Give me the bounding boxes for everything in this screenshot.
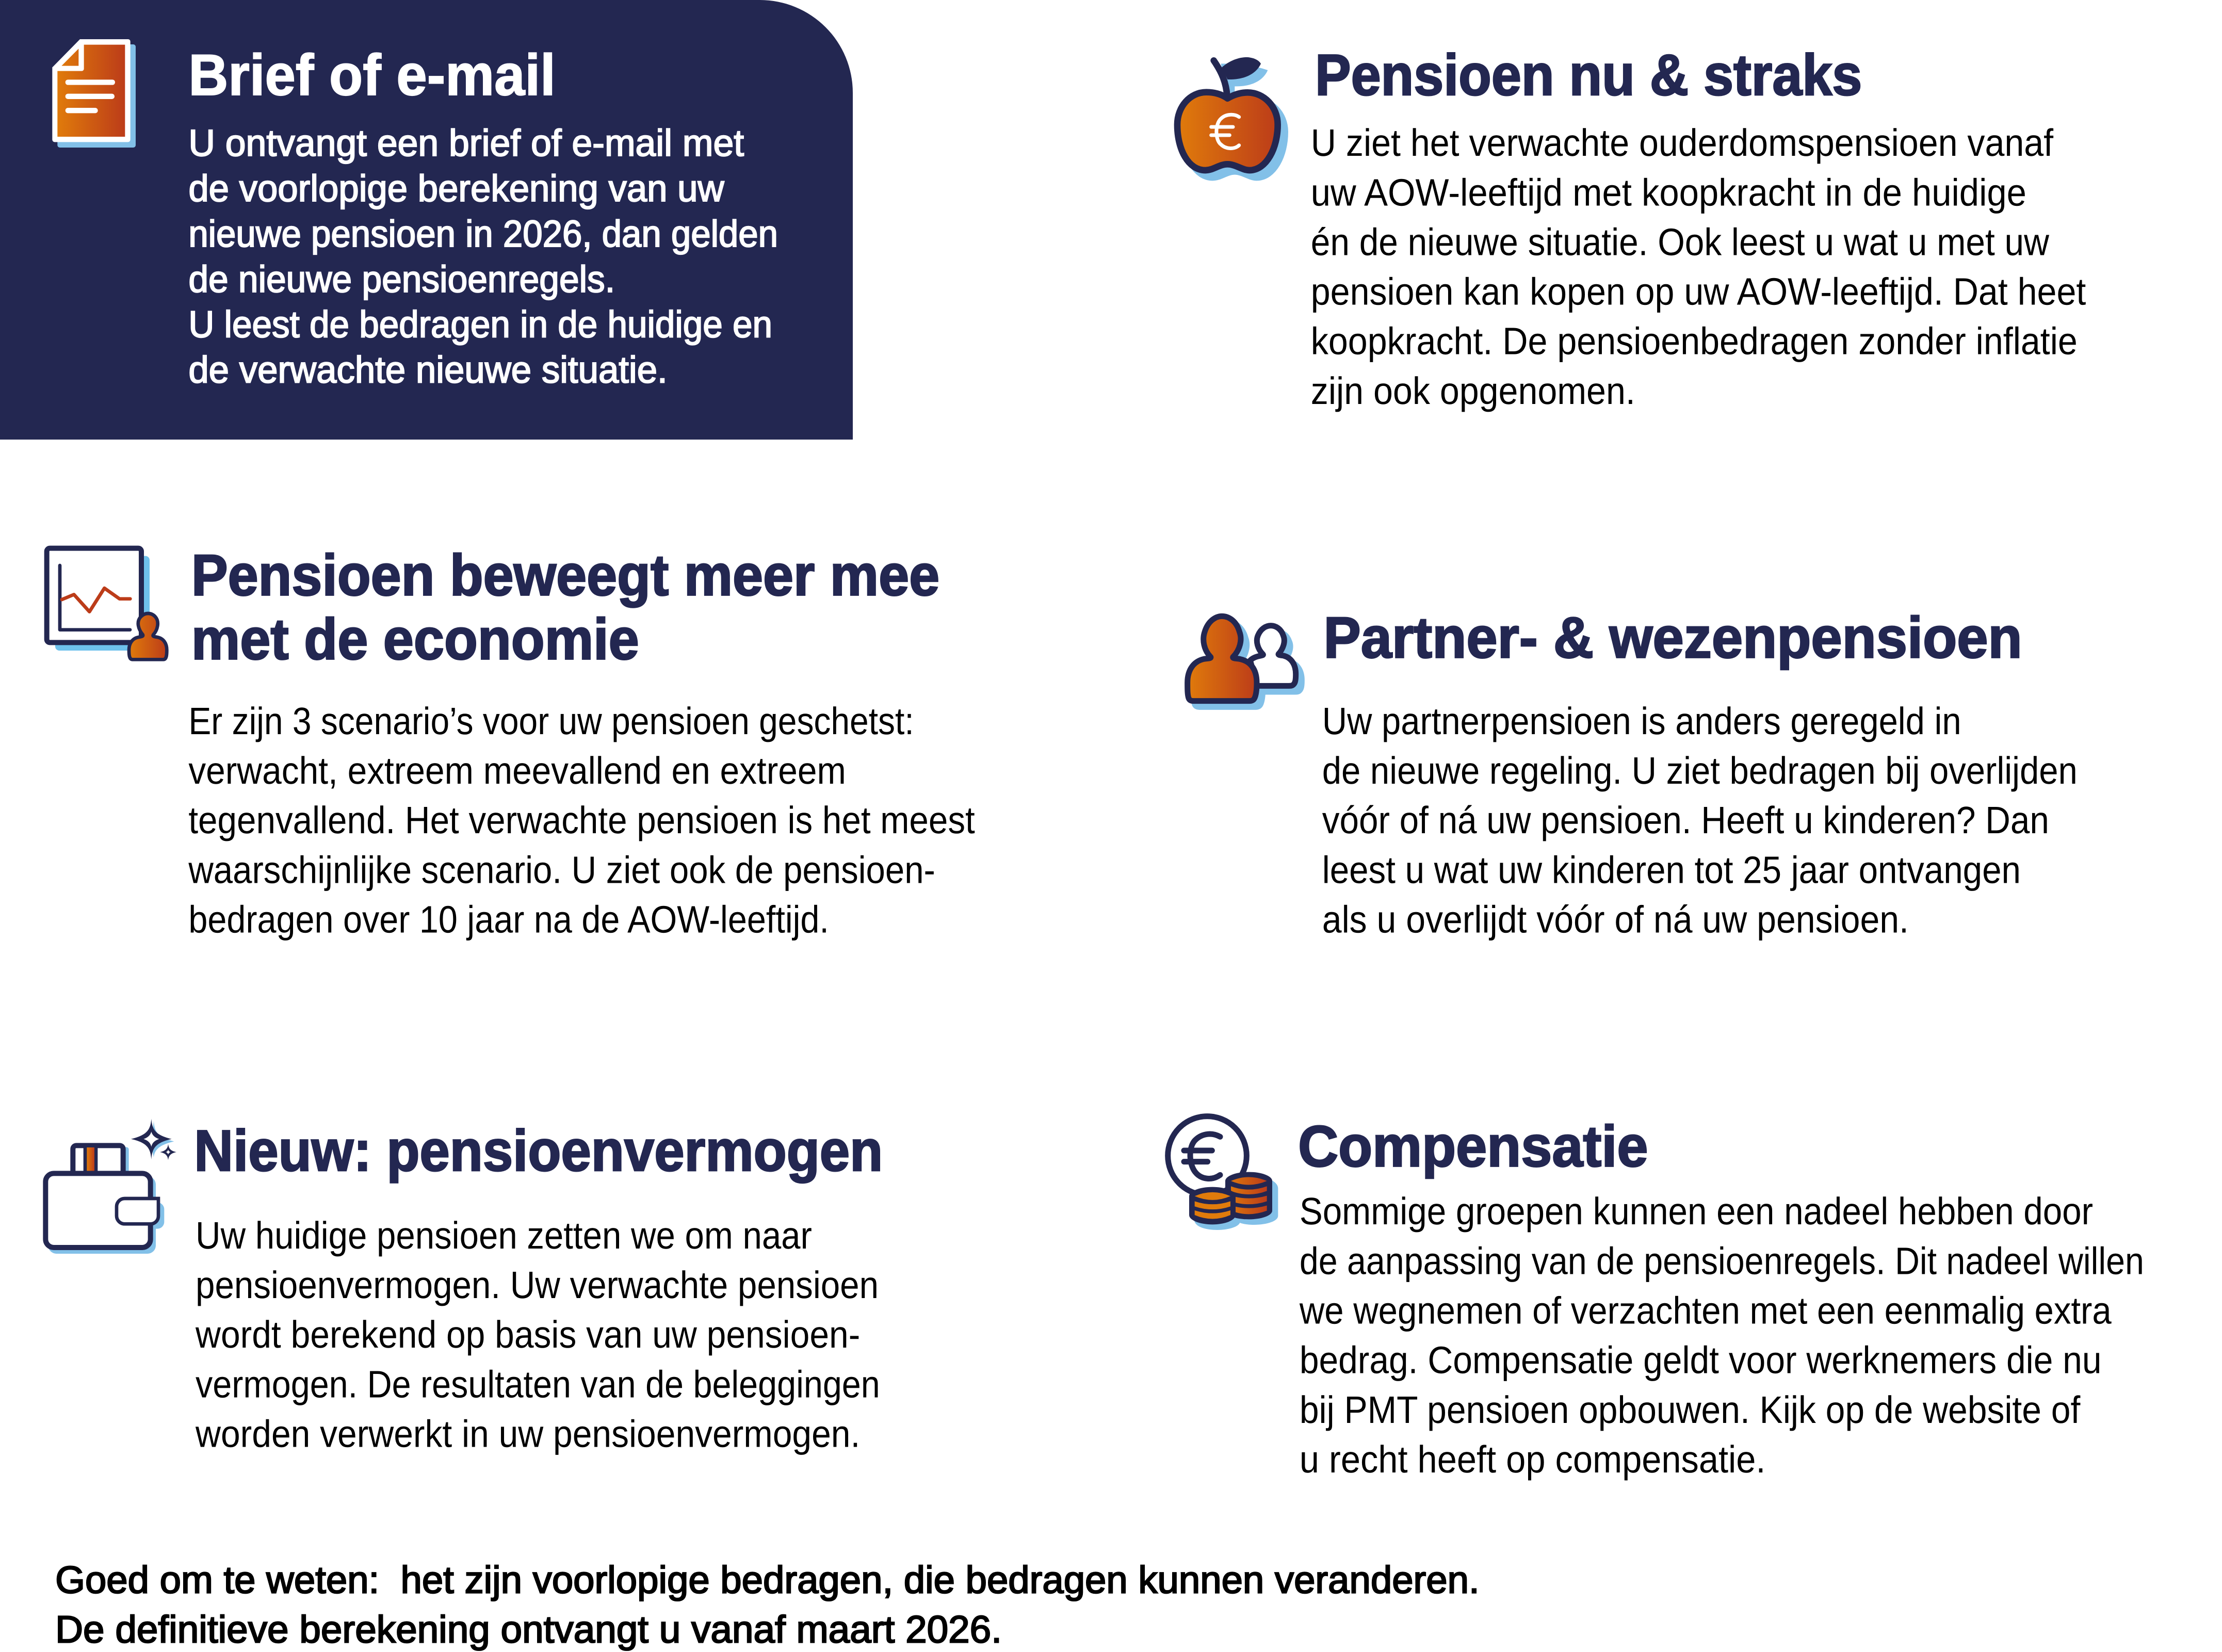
text block: pensioen nu body: zijn ook opgenomen. (1311, 370, 1635, 412)
section: Nieuw: pensioenvermogen (45, 1118, 883, 1455)
text block: pensioenvermogen body: worden verwerkt in uw pensioenvermogen. (194, 1413, 860, 1455)
text block: brief body (188, 122, 778, 391)
heading: Pensioen beweegt meer mee met de economie: met de economie (191, 607, 639, 672)
footer note (55, 1559, 1480, 1651)
text block: pensioen nu body (1311, 122, 2087, 412)
text block: pensioenvermogen body: wordt berekend op basis van uw pensioen- (194, 1314, 860, 1356)
footer note: Goed om te weten: het zijn voorlopige bedragen, die bedragen kunnen veranderen. (55, 1559, 1480, 1601)
text block: partner body: vóór of ná uw pensioen. Heeft u kinderen? Dan (1322, 799, 2049, 842)
text block: pensioen nu body: pensioen kan kopen op uw AOW-leeftijd. Dat heet (1311, 271, 2087, 313)
text block: compensatie body: we wegnemen of verzachten met een eenmalig extra (1298, 1290, 2113, 1332)
text block: partner body: de nieuwe regeling. U ziet bedragen bij overlijden (1322, 750, 2078, 792)
text block: compensatie body: Sommige groepen kunnen een nadeel hebben door (1300, 1190, 2093, 1233)
heading: Compensatie: Compensatie (1298, 1114, 1648, 1179)
text block: partner body: als u overlijdt vóór of ná uw pensioen. (1322, 898, 1909, 941)
heading: Nieuw: pensioenvermogen: Nieuw: pensioenvermogen (194, 1118, 883, 1184)
text block: partner body: leest u wat uw kinderen tot 25 jaar ontvangen (1322, 849, 2021, 892)
text block: partner body (1322, 700, 2078, 941)
heading: Pensioen beweegt meer mee met de economie (191, 543, 939, 672)
icon: two persons (1188, 616, 1302, 707)
icon: chart with person (47, 548, 167, 659)
heading: Pensioen beweegt meer mee met de economie: Pensioen beweegt meer mee (191, 543, 939, 608)
text block: pensioenvermogen body: Uw huidige pensioen zetten we om naar (196, 1214, 812, 1257)
text block: economie body: waarschijnlijke scenario. U ziet ook de pensioen- (187, 849, 935, 892)
footer note: De definitieve berekening ontvangt u vanaf maart 2026. (55, 1609, 1002, 1651)
section: Compensatie (1168, 1114, 2144, 1481)
text block: pensioenvermogen body: vermogen. De resultaten van de beleggingen (196, 1363, 880, 1406)
text block: economie body: verwacht, extreem meevallend en extreem (188, 750, 846, 792)
text block: compensatie body: u recht heeft op compensatie. (1300, 1438, 1766, 1481)
text block: pensioenvermogen body (194, 1214, 880, 1455)
icon: euro coin and stacks (1168, 1116, 1278, 1230)
text block: brief body: U ontvangt een brief of e-mail met (188, 122, 745, 165)
text block: pensioen nu body: én de nieuwe situatie. Ook leest u wat u met uw (1311, 221, 2050, 264)
icon: wallet with sparkles (45, 1119, 176, 1254)
icon: apple with euro (1177, 57, 1285, 177)
text block: partner body: Uw partnerpensioen is anders geregeld in (1322, 700, 1961, 742)
text block: economie body (187, 700, 976, 941)
text block: brief body: de verwachte nieuwe situatie. (188, 349, 668, 391)
section: Pensioen nu & straks (1177, 42, 2087, 412)
text block: compensatie body (1298, 1190, 2144, 1481)
panel background (0, 0, 853, 440)
text block: economie body: Er zijn 3 scenario’s voor uw pensioen geschetst: (188, 700, 914, 742)
text block: compensatie body: de aanpassing van de pensioenregels. Dit nadeel willen (1300, 1240, 2144, 1283)
icon: document (52, 39, 136, 148)
panel: Brief of e-mail (0, 0, 853, 440)
text block: pensioen nu body: koopkracht. De pensioenbedragen zonder inflatie (1311, 320, 2078, 363)
text block: brief body: de voorlopige berekening van uw (188, 167, 725, 210)
section: Pensioen beweegt meer mee (47, 543, 976, 941)
text block: brief body: U leest de bedragen in de huidige en (188, 303, 772, 346)
text block: economie body: tegenvallend. Het verwachte pensioen is het meest (188, 799, 976, 842)
heading: Pensioen nu & straks: Pensioen nu & straks (1315, 42, 1862, 108)
text block: brief body: de nieuwe pensioenregels. (188, 258, 615, 300)
heading: Partner- & wezenpensioen: Partner- & wezenpensioen (1324, 605, 2022, 670)
text block: compensatie body: bedrag. Compensatie geldt voor werknemers die nu (1300, 1339, 2102, 1382)
heading: Brief of e-mail: Brief of e-mail (188, 42, 556, 108)
text block: pensioen nu body: uw AOW-leeftijd met koopkracht in de huidige (1311, 171, 2026, 214)
text block: economie body: bedragen over 10 jaar na de AOW-leeftijd. (188, 898, 829, 941)
text block: compensatie body: bij PMT pensioen opbouwen. Kijk op de website of (1300, 1389, 2081, 1431)
text block: pensioen nu body: U ziet het verwachte ouderdomspensioen vanaf (1311, 122, 2054, 165)
text block: pensioenvermogen body: pensioenvermogen. Uw verwachte pensioen (196, 1264, 879, 1307)
section: Partner- & wezenpensioen (1188, 605, 2078, 941)
text block: brief body: nieuwe pensioen in 2026, dan gelden (188, 213, 778, 255)
